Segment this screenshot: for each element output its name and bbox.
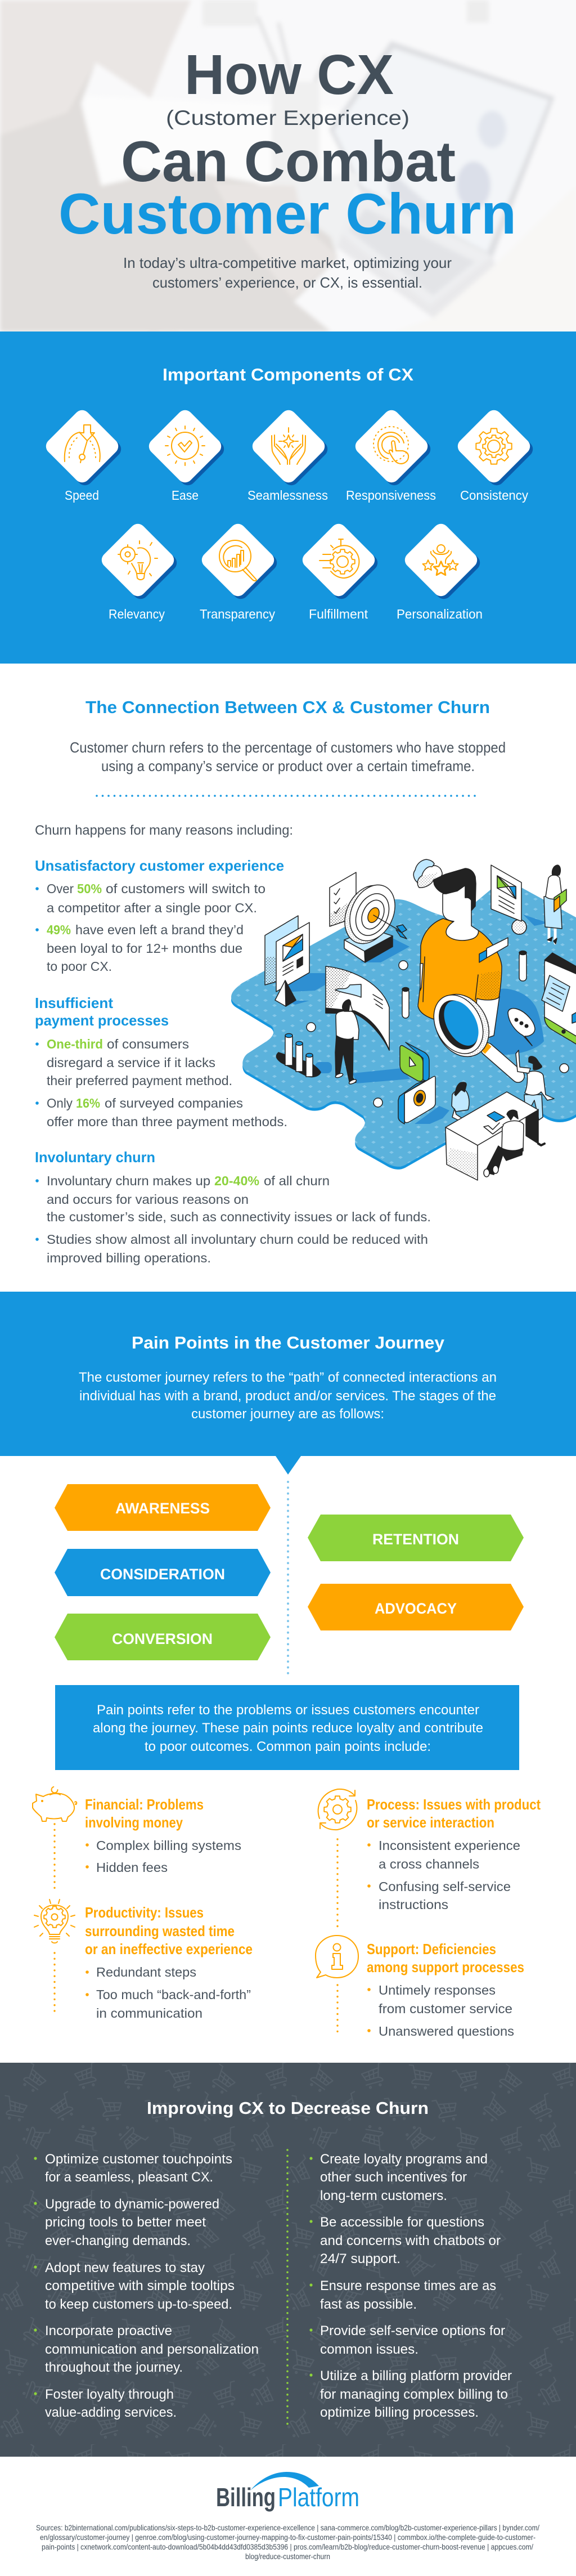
intro text: customers’ experience, or CX, is essential. <box>152 274 422 291</box>
reason: involuntary churn: Involuntary churn <box>35 1149 155 1166</box>
pain point: productivity <box>34 1899 253 2021</box>
component: ease <box>146 407 227 503</box>
heading: pain points: Pain Points in the Customer Journey <box>132 1333 445 1352</box>
magnifying glass <box>424 985 518 1076</box>
component: relevancy <box>98 521 180 621</box>
right tips list: optimize billing processes. <box>320 2405 479 2420</box>
cloud <box>413 859 442 888</box>
pain point: process: instructions <box>379 1897 448 1912</box>
reason: insufficient payment processes: One-third <box>47 1037 103 1051</box>
left tips list: Optimize customer touchpoints <box>45 2152 232 2167</box>
definition text <box>70 739 506 774</box>
pain point: financial: Hidden fees <box>96 1860 168 1875</box>
stage: consideration <box>55 1549 271 1596</box>
right tips list: Be accessible for questions <box>320 2215 484 2230</box>
checklist card <box>330 872 356 926</box>
stage: conversion: CONVERSION <box>112 1630 213 1647</box>
reason: unsatisfactory customer experience: Unsatisfactory customer experience <box>35 857 284 874</box>
component: speed: Speed <box>65 488 99 503</box>
pain point: process: a cross channels <box>379 1857 479 1871</box>
left tips list: competitive with simple tooltips <box>45 2278 235 2293</box>
waving woman <box>516 1050 554 1120</box>
component: responsiveness: Responsiveness <box>346 488 436 503</box>
seated woman <box>452 1082 469 1124</box>
pain point: process: Confusing self-service <box>379 1879 511 1894</box>
left tips list <box>34 2152 259 2420</box>
component: relevancy: Relevancy <box>109 607 165 621</box>
pain point: support: Unanswered questions <box>379 2024 514 2039</box>
reason: involuntary churn: and occurs for various reasons on <box>47 1192 249 1207</box>
component: fulfillment <box>299 521 381 621</box>
journey definition text: individual has with a brand, product and/or services. The stages of the <box>79 1388 496 1404</box>
component: transparency: Transparency <box>200 607 275 621</box>
component: seamlessness: Seamlessness <box>248 488 328 503</box>
reason: insufficient payment processes <box>35 994 287 1129</box>
icon: piggy bank <box>33 1786 76 1821</box>
left tips list: pricing tools to better meet <box>45 2215 206 2230</box>
reason: involuntary churn: Studies show almost all involuntary churn could be reduced with <box>47 1232 428 1247</box>
left tips list: Adopt new features to stay <box>45 2260 205 2275</box>
lead-in text: Churn happens for many reasons including: <box>35 823 293 838</box>
stage: awareness: AWARENESS <box>115 1500 210 1517</box>
bar chart pillars <box>276 1033 321 1077</box>
pain point: financial: Financial: Problems <box>85 1796 204 1813</box>
reason: unsatisfactory customer experience: 49% <box>47 922 71 937</box>
reason: insufficient payment processes: of consumers <box>107 1037 189 1051</box>
logo: BillingPlatform: Platform <box>278 2483 359 2512</box>
left report cards <box>265 916 309 1006</box>
reason: involuntary churn: improved billing operations. <box>47 1251 211 1265</box>
definition text: Customer churn refers to the percentage of customers who have stopped <box>70 739 506 756</box>
reason: insufficient payment processes: offer more than three payment methods. <box>47 1114 287 1129</box>
small spheres and pillars <box>307 920 569 1107</box>
curved paper with standing man <box>326 966 389 1085</box>
pain point: productivity: surrounding wasted time <box>85 1923 235 1939</box>
left tips list: value-adding services. <box>45 2405 177 2420</box>
play and eye tiles <box>398 1042 435 1124</box>
logo: BillingPlatform <box>216 2472 359 2512</box>
panel: pain points in the customer journey <box>0 1292 576 2039</box>
stage: retention <box>308 1515 524 1561</box>
right tips list: Create loyalty programs and <box>320 2152 488 2167</box>
callout: pain point definition: along the journey. These pain points reduce loyalty and contribute <box>93 1721 483 1736</box>
right tips list: fast as possible. <box>320 2297 417 2312</box>
heading: components: Important Components of CX <box>163 365 413 384</box>
journey definition text: customer journey are as follows: <box>191 1406 384 1422</box>
component: personalization <box>397 521 483 621</box>
pain point: process: Process: Issues with product <box>367 1796 541 1813</box>
callout: pain point definition: Pain points refer to the problems or issues customers encounter <box>97 1703 479 1718</box>
icon: lightbulb with gear <box>34 1899 75 1943</box>
panel: improving CX to decrease churn <box>0 2063 576 2457</box>
right tips list: 24/7 support. <box>320 2251 400 2266</box>
reason: involuntary churn: the customer’s side, such as connectivity issues or lack of funds. <box>47 1209 431 1224</box>
title: Can Combat <box>121 129 456 194</box>
main figure with orange shirt <box>418 868 508 1041</box>
sources <box>36 2523 539 2561</box>
reason: unsatisfactory customer experience: Over <box>47 881 74 896</box>
definition text: using a company’s service or product over a certain timeframe. <box>101 758 475 774</box>
title: How CX <box>184 43 394 106</box>
reason: insufficient payment processes: of surveyed companies <box>105 1096 243 1110</box>
reason: insufficient payment processes: payment processes <box>35 1012 169 1029</box>
reason: involuntary churn: Involuntary churn makes up <box>47 1173 210 1188</box>
reason: insufficient payment processes: Only <box>47 1096 73 1110</box>
right tips list: other such incentives for <box>320 2170 467 2185</box>
component: consistency <box>454 407 536 503</box>
left tips list: to keep customers up-to-speed. <box>45 2297 232 2312</box>
right tips list: long-term customers. <box>320 2188 447 2203</box>
component: speed <box>43 407 124 503</box>
pain point: support: Support: Deficiencies <box>367 1941 496 1957</box>
left tips list: communication and personalization <box>45 2342 259 2357</box>
reason: unsatisfactory customer experience: have even left a brand they’d <box>75 922 244 937</box>
stage: retention: RETENTION <box>372 1531 459 1548</box>
tablet <box>542 953 576 1045</box>
reason: insufficient payment processes: 16% <box>76 1096 100 1110</box>
reason: insufficient payment processes: disregard a service if it lacks <box>47 1055 215 1070</box>
component: ease: Ease <box>172 488 199 503</box>
reason: unsatisfactory customer experience: of customers will switch to <box>106 881 266 896</box>
title: Customer Churn <box>58 182 516 246</box>
reason: insufficient payment processes: their preferred payment method. <box>47 1073 232 1088</box>
component: responsiveness <box>346 407 436 503</box>
stage: awareness <box>55 1484 271 1531</box>
pain point: process: or service interaction <box>367 1814 494 1831</box>
journey definition text <box>79 1370 497 1422</box>
left tips list: for a seamless, pleasant CX. <box>45 2170 213 2185</box>
right tips list: Provide self-service options for <box>320 2323 505 2338</box>
right tips list: for managing complex billing to <box>320 2387 508 2402</box>
logo: BillingPlatform: Billing <box>216 2483 276 2512</box>
stage: advocacy: ADVOCACY <box>375 1600 457 1617</box>
stage: advocacy <box>308 1584 524 1630</box>
left tips list: Incorporate proactive <box>45 2323 172 2338</box>
pain point: productivity: Productivity: Issues <box>85 1904 204 1921</box>
pain point: productivity: Too much “back-and-forth” <box>96 1987 251 2002</box>
desk with seated man <box>446 1092 544 1180</box>
right tips list: and concerns with chatbots or <box>320 2233 501 2248</box>
reason: unsatisfactory customer experience: 50% <box>77 881 102 896</box>
callout: pain point definition: to poor outcomes. Common pain points include: <box>145 1739 431 1754</box>
intro text <box>123 254 452 291</box>
title: (Customer Experience) <box>166 106 410 129</box>
component: seamlessness <box>248 407 331 503</box>
woman with folder <box>544 865 566 944</box>
panel: important components of CX <box>0 331 576 664</box>
stage: consideration: CONSIDERATION <box>100 1566 225 1583</box>
illustration: isometric customer experience scene <box>231 859 576 1180</box>
pain point: process <box>318 1789 541 1912</box>
title <box>58 43 516 246</box>
target with arrow <box>344 885 407 963</box>
reason: unsatisfactory customer experience: a competitor after a single poor CX. <box>47 901 257 915</box>
pain point: support: from customer service <box>379 2001 512 2016</box>
pain point: financial <box>33 1786 241 1875</box>
heading: improving CX: Improving CX to Decrease Churn <box>147 2098 429 2118</box>
reason: unsatisfactory customer experience <box>35 857 284 974</box>
heading: connection: The Connection Between CX & Customer Churn <box>86 697 490 717</box>
reason: involuntary churn: 20-40% <box>214 1173 259 1188</box>
right tips list: Ensure response times are as <box>320 2278 496 2293</box>
pain point: support <box>316 1936 524 2039</box>
component: fulfillment: Fulfillment <box>309 607 368 621</box>
right report card <box>491 865 521 921</box>
pain point: process: Inconsistent experience <box>379 1838 520 1853</box>
icon: info speech bubble <box>316 1936 358 1978</box>
panel: hero <box>0 0 576 338</box>
right tips list: Utilize a billing platform provider <box>320 2368 512 2384</box>
pain point: financial: Complex billing systems <box>96 1838 241 1853</box>
reason: involuntary churn <box>35 1149 431 1265</box>
intro text: In today’s ultra-competitive market, optimizing your <box>123 254 452 271</box>
right tips list: common issues. <box>320 2342 418 2357</box>
panel: connection between CX and churn <box>35 697 576 1265</box>
pain point: productivity: in communication <box>96 2006 202 2021</box>
sources: blog/reduce-customer-churn <box>245 2552 330 2561</box>
callout: pain point definition <box>55 1685 519 1770</box>
component: consistency: Consistency <box>460 488 528 503</box>
reason: unsatisfactory customer experience: been loyal to for 12+ months due <box>47 941 242 956</box>
right tips list <box>309 2152 512 2420</box>
reason: involuntary churn: of all churn <box>264 1173 330 1188</box>
left tips list: Upgrade to dynamic-powered <box>45 2197 219 2212</box>
stage: conversion <box>55 1614 271 1660</box>
reason: insufficient payment processes: Insufficient <box>35 994 113 1011</box>
icon: gear cycle <box>318 1789 357 1830</box>
reason: unsatisfactory customer experience: to poor CX. <box>47 959 112 974</box>
component: transparency <box>199 521 280 621</box>
journey definition text: The customer journey refers to the “path” of connected interactions an <box>79 1370 497 1385</box>
left tips list: Foster loyalty through <box>45 2387 174 2402</box>
pain point: financial: involving money <box>85 1814 183 1831</box>
pain point: support: among support processes <box>367 1959 524 1975</box>
left tips list: throughout the journey. <box>45 2360 183 2375</box>
speech bubble <box>508 1009 535 1046</box>
hero blurred photo background <box>0 0 576 338</box>
pain point: productivity: Redundant steps <box>96 1965 196 1979</box>
component: personalization: Personalization <box>397 607 483 621</box>
left tips list: ever-changing demands. <box>45 2233 191 2248</box>
pain point: productivity: or an ineffective experience <box>85 1941 253 1957</box>
pain point: support: Untimely responses <box>379 1983 496 1997</box>
